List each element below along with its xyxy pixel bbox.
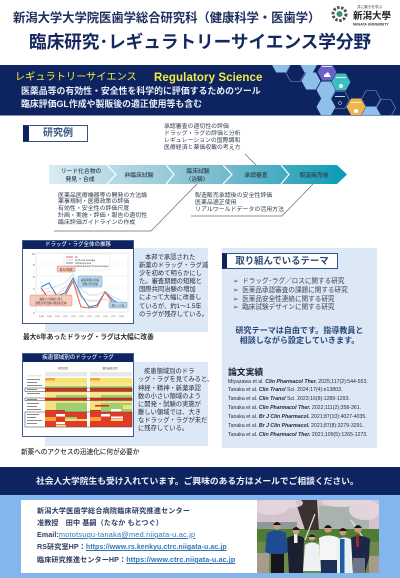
heatmap — [24, 366, 132, 428]
heatmap title — [23, 354, 133, 362]
line chart: 審査上の短縮に加え — [39, 297, 63, 301]
line chart: 2011 — [63, 316, 68, 318]
line chart: 2010 — [55, 316, 61, 318]
line chart: 2017 — [111, 316, 117, 318]
line chart: 0 — [33, 311, 35, 315]
caption: disease area: 新薬へのアクセスの迅速化に何が必要か — [21, 449, 139, 456]
line chart: 2014 — [87, 316, 93, 318]
line chart: 2009 — [47, 316, 53, 318]
text: drug lag explanation — [139, 254, 208, 318]
note below arrow: development: 有効性・安全性の評価尺度 — [58, 206, 129, 212]
call to action band — [0, 467, 400, 495]
publications list: Tanaka et al. Clin Pharmacol Ther. 2022;111(2):358-361. — [228, 405, 361, 411]
leader lines — [54, 184, 314, 232]
themes list — [233, 277, 348, 311]
line chart — [30, 252, 128, 318]
panel: disease area background — [45, 362, 208, 446]
text: disease area explanation: 数の小さい領域のよう — [138, 393, 201, 400]
line chart: 8 — [33, 263, 35, 267]
banner heading: Regulatory Science — [154, 72, 263, 84]
heatmap: 優先審査品目 — [102, 366, 118, 370]
note below arrow: development — [58, 192, 147, 226]
publications list: Tanaka et al. Br J Clin Pharmacol. 2021;87(8):3279-3291. — [228, 423, 364, 429]
line chart: 10 — [32, 252, 35, 256]
note below arrow: development: 医薬品医療機器等の開発の方法論 — [58, 192, 147, 198]
line chart: 2015 — [95, 316, 101, 318]
university heading: 新潟大学大学院医歯学総合研究科（健康科学・医歯学） — [13, 11, 320, 25]
line chart: All (5-year average) — [75, 259, 95, 262]
themes heading — [222, 253, 338, 269]
text: disease area explanation: 難しい領域では、大き — [138, 409, 201, 416]
text: drug lag explanation: 国際共同治験の増加 — [139, 286, 196, 293]
text: drug lag explanation: た。審査期間の短縮と — [139, 278, 202, 285]
line chart: 国際共同治験 — [82, 282, 98, 286]
panel: disease area heatmap — [22, 353, 134, 437]
panel: themes and publications — [222, 248, 377, 448]
text: drug lag explanation: のラグが残存している。 — [139, 311, 208, 318]
note above arrow: approval: 医療経済と薬価収載の考え方 — [164, 145, 241, 151]
panel: drug lag chart — [22, 240, 134, 324]
publications heading: 論文実績 — [228, 367, 263, 377]
themes message: 研究テーマは自由です。指導教員と — [236, 326, 363, 335]
university logo — [332, 4, 391, 26]
line chart: 審査期間の短縮 — [81, 278, 99, 282]
contact text: 臨床研究推進センターHP：https://www.ctrc.niigata-u.ac.jp — [37, 555, 235, 564]
banner heading — [15, 71, 263, 84]
note below arrow: post-marketing: 医薬品適正使用 — [195, 200, 237, 206]
publications list: Tanaka et al. Clin Transl Sci. 2023;16(8):1289-1293. — [228, 396, 350, 402]
banner text — [21, 86, 261, 109]
note below arrow: post-marketing: リアルワールドデータの活用方法 — [195, 206, 284, 212]
themes list: ➢ 医薬品承認審査の課題に関する研究 — [233, 287, 348, 294]
university logo: 新潟大學 — [353, 10, 391, 22]
section heading: research examples: 研究例 — [43, 128, 73, 139]
banner text: 臨床評価GL作成や製販後の適正使用等も含む — [21, 99, 202, 109]
text: disease area explanation: ッグ・ラグを見てみると、 — [138, 376, 213, 383]
themes message: 相談しながら設定していきます。 — [240, 336, 359, 345]
main title: 臨床研究･レギュラトリーサイエンス学分野 — [29, 32, 371, 52]
line chart: 約1〜1.5年 — [112, 304, 125, 308]
text: disease area explanation: に開発・試験の実施が — [138, 401, 201, 408]
line chart: 2008 — [39, 316, 45, 318]
publications list — [228, 379, 368, 438]
line chart: 最大6年超 — [60, 268, 73, 272]
heatmap: 承認品目 — [58, 366, 68, 370]
people — [265, 530, 288, 573]
line chart: 2013 — [79, 316, 85, 318]
themes list: ➢ ドラッグ･ラグ／ロスに関する研究 — [233, 278, 344, 285]
text: disease area explanation: なドラッグ・ラグが未だ — [138, 417, 207, 424]
themes message — [236, 326, 363, 345]
line chart: 6 — [33, 275, 35, 279]
note above arrow: approval: 承認審査の適切性の評価 — [164, 124, 229, 130]
process arrow — [49, 154, 347, 184]
call to action band: 社会人大学院生も受け入れています。ご興味のある方はメールでご相談ください。 — [36, 476, 359, 486]
text: disease area explanation: に残存している。 — [138, 425, 188, 432]
section heading: research examples — [23, 125, 88, 142]
line chart: 2016 — [103, 316, 109, 318]
process arrow: リード化合物の — [61, 167, 101, 175]
line chart: 4 — [33, 287, 35, 291]
footer background — [0, 495, 400, 578]
process arrow: 製造販売後 — [300, 171, 329, 179]
process arrow: 承認審査 — [244, 171, 268, 179]
contact box — [21, 500, 257, 573]
text: drug lag explanation: 本邦で承認された — [145, 254, 195, 261]
banner text: 医薬品等の有効性・安全性を科学的に評価するためのツール — [21, 86, 261, 96]
heatmap title: 疾患領域別のドラッグ・ラグ — [42, 355, 114, 361]
note below arrow: development: 臨床評価ガイドラインの作成 — [58, 220, 135, 226]
themes list: ➢ 医薬品安全性連絡に関する研究 — [233, 296, 335, 303]
line chart: 2018 — [119, 316, 125, 318]
contact text: Email:mototsugu-tanaka@med.niigata-u.ac.jp — [37, 530, 195, 539]
process arrow: （治験） — [185, 175, 209, 183]
process arrow: 非臨床試験 — [124, 171, 154, 179]
themes heading: 取り組んでいるテーマ — [235, 255, 329, 266]
note below arrow: post-marketing — [195, 192, 284, 212]
contact text: 新潟大学医歯学総合病院臨床研究推進センター — [37, 507, 190, 515]
university logo: 共に働きを学ぶ — [357, 4, 383, 9]
text: drug lag explanation: 新薬のドラッグ・ラグ減 — [139, 262, 208, 269]
contact text — [37, 507, 236, 564]
text: disease area explanation — [138, 368, 213, 432]
chart title: ドラッグ・ラグ全体の推移 — [45, 242, 111, 248]
banner: regulatory science — [0, 65, 400, 116]
caption: drug lag: 最大6年あったドラッグ・ラグは大幅に改善 — [23, 334, 154, 341]
publications list: Miyazawa et al. Clin Pharmacol Ther. 2025;117(2):544-553. — [228, 379, 368, 385]
text: drug lag explanation: によって大幅に改善し — [139, 294, 201, 301]
publications list: Tanaka et al. Clin Pharmacol Ther. 2021;109(5):1265-1273. — [228, 432, 368, 438]
note below arrow: development: 計画・実施・評価・報告の適切性 — [58, 213, 147, 219]
text: drug lag explanation: ているが、約1〜1.5年 — [139, 303, 202, 310]
note below arrow: post-marketing: 製造販売承認後の安全性評価 — [195, 192, 272, 198]
contact text: RS研究室HP：https://www.rs.kenkyu.ctrc.niigata-u.ac.jp — [37, 543, 227, 551]
banner heading: レギュラトリーサイエンス — [15, 72, 137, 83]
group photo — [257, 500, 379, 573]
text: drug lag explanation: 少を初めて明らかにし — [139, 270, 202, 277]
university logo: NIIGATA UNIVERSITY — [353, 22, 389, 26]
text: disease area explanation: 神経・精神・新薬承認 — [138, 384, 201, 392]
text: disease area explanation: 疾患領域別のドラ — [144, 368, 194, 375]
themes list: ➢ 臨床試験デザインに関する研究 — [233, 304, 335, 311]
line chart: Global approval (5-year average) — [75, 265, 109, 268]
chart title — [23, 241, 133, 249]
line chart: All — [75, 256, 78, 259]
note above arrow: approval — [164, 123, 241, 151]
note above arrow: approval: ドラッグ・ラグの評価と分析 — [164, 131, 241, 137]
line chart: 国際共同治験の増加を反映 — [35, 301, 67, 305]
publications list: Tanaka et al. Clin Transl Sci. 2024;17(4):e13803. — [228, 387, 342, 393]
process arrow: 臨床試験 — [186, 167, 210, 175]
process arrow: 発見・合成 — [66, 175, 95, 183]
hexagon graphic — [272, 65, 396, 115]
note below arrow: development: 薬事規制・医療政策の評価 — [58, 199, 129, 205]
publications list: Tanaka et al. Br J Clin Pharmacol. 2021;87(10):4027-4035. — [228, 414, 367, 420]
line chart: 2 — [33, 299, 35, 303]
note above arrow: approval: レギュレーションの国際調和 — [164, 138, 240, 144]
line chart: 2012 — [71, 316, 77, 318]
contact text: 准教授 田中 基嗣（たなか もとつぐ） — [37, 519, 163, 527]
panel: drug lag background — [45, 248, 208, 332]
line chart: Global approval — [75, 262, 92, 265]
